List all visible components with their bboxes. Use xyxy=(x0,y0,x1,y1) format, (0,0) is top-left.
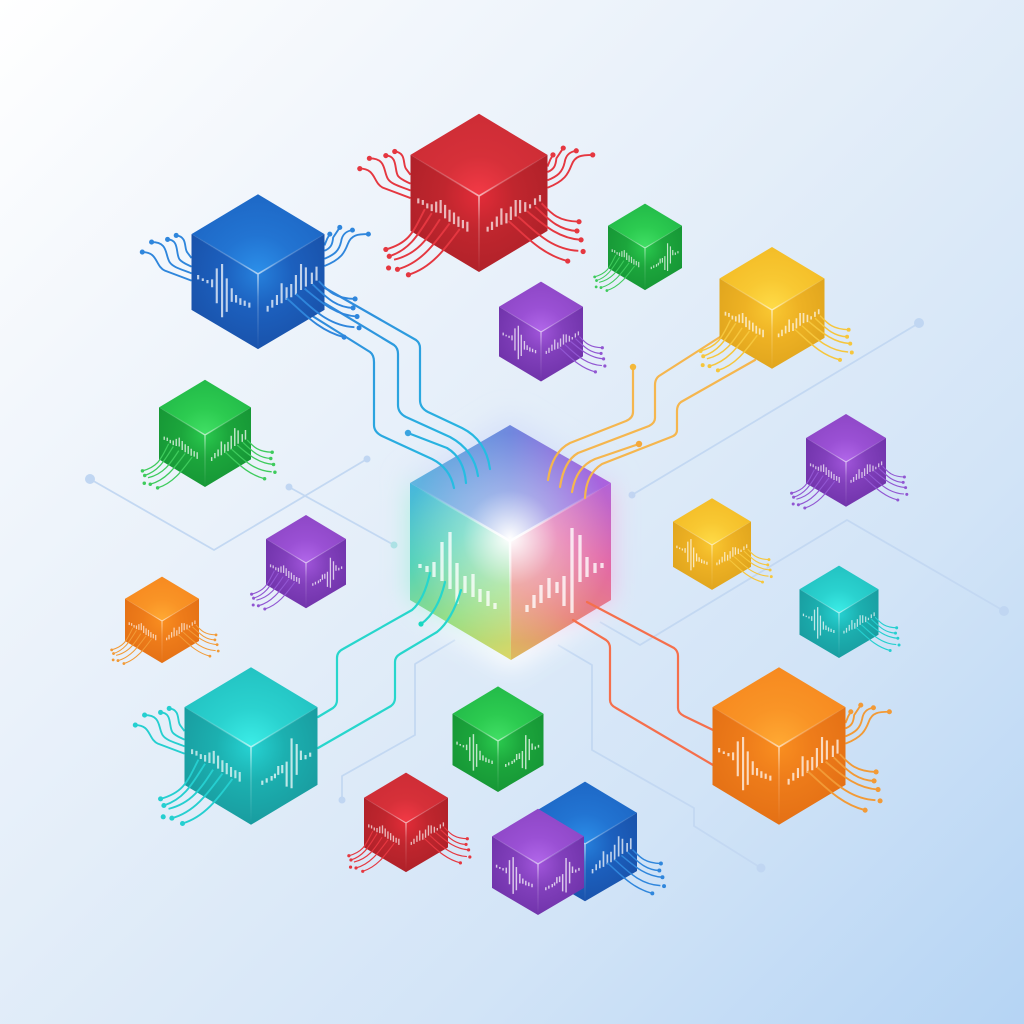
cube: teal small xyxy=(800,566,901,658)
waveforms xyxy=(164,428,245,461)
waveform xyxy=(593,836,631,873)
wires xyxy=(357,145,595,198)
waveforms xyxy=(369,822,443,845)
wires: blue to centre xyxy=(290,284,490,488)
cube: green centre bottom xyxy=(452,686,544,792)
cube: orange large xyxy=(712,667,892,825)
background connector lines xyxy=(85,318,1009,872)
cube: purple top xyxy=(499,282,606,382)
faces xyxy=(806,414,886,507)
waveforms xyxy=(192,738,310,788)
faces xyxy=(266,515,346,608)
cube edges xyxy=(410,483,611,660)
cube: teal large xyxy=(133,667,318,826)
cube: red small xyxy=(347,773,471,873)
faces xyxy=(800,566,878,658)
waveforms xyxy=(803,607,874,639)
cube: yellow small xyxy=(673,498,773,590)
cube: purple left xyxy=(250,515,346,611)
central rainbow cube xyxy=(400,415,622,670)
bundle xyxy=(808,754,883,813)
bundles xyxy=(110,625,220,665)
cube: green top right xyxy=(593,204,682,292)
cube: orange small xyxy=(110,577,220,665)
waveforms xyxy=(725,309,819,337)
waveforms xyxy=(677,539,747,570)
bundle xyxy=(287,281,362,340)
faces xyxy=(184,667,318,825)
bundle xyxy=(729,549,773,584)
faces xyxy=(159,380,251,487)
faces xyxy=(673,498,751,590)
central light xyxy=(410,425,611,660)
faces xyxy=(720,247,824,369)
bundle xyxy=(593,255,635,292)
faces xyxy=(364,773,448,872)
bundle xyxy=(559,336,606,373)
wires: teal to centre xyxy=(318,573,461,748)
faces xyxy=(712,667,846,825)
faces xyxy=(608,204,682,290)
wires: orange to centre xyxy=(573,602,713,765)
waveforms xyxy=(129,620,195,640)
cube: yellow large xyxy=(699,247,854,372)
faces xyxy=(192,194,324,349)
cube: purple front xyxy=(492,809,584,915)
waveforms xyxy=(198,264,317,317)
faces xyxy=(125,577,199,663)
wires xyxy=(140,225,371,281)
bundle xyxy=(250,571,295,611)
cube: blue bottom xyxy=(533,782,666,901)
cube: blue large xyxy=(140,194,371,349)
right face xyxy=(510,483,611,660)
bundle xyxy=(158,760,232,826)
waveforms xyxy=(811,461,882,483)
bundle xyxy=(856,617,901,652)
cube: green left xyxy=(141,380,277,490)
faces xyxy=(492,809,584,915)
waveforms xyxy=(719,737,838,790)
waveform right xyxy=(527,528,602,613)
bundles xyxy=(141,440,277,490)
waveforms xyxy=(612,243,678,271)
bundles xyxy=(790,466,908,510)
waveform left xyxy=(420,532,495,609)
waveforms xyxy=(457,734,538,771)
waveforms xyxy=(271,558,342,588)
faces xyxy=(533,782,637,901)
faces xyxy=(410,114,548,272)
wires xyxy=(846,703,892,744)
waveforms xyxy=(503,326,578,359)
faces xyxy=(452,686,544,792)
waveforms xyxy=(497,857,579,894)
cube: purple right xyxy=(790,414,908,510)
bundles xyxy=(383,203,586,277)
faces xyxy=(499,282,583,382)
wires: yellow to centre xyxy=(548,337,755,498)
waveforms xyxy=(418,195,540,232)
top face xyxy=(410,425,611,541)
left face xyxy=(410,483,511,660)
cube: red large xyxy=(357,114,595,277)
bundles xyxy=(699,316,854,372)
wires xyxy=(133,706,184,754)
bundles xyxy=(347,827,471,873)
bundle xyxy=(607,850,666,895)
cube glow halo xyxy=(400,415,622,670)
